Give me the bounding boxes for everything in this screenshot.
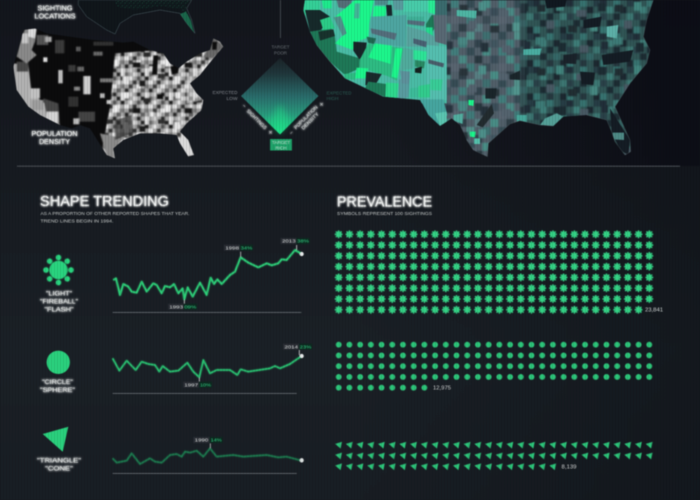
heading: shape trending: SHAPE TRENDING [40, 193, 169, 210]
legend: sightings axis: × [269, 130, 273, 136]
label: population density: POPULATION [32, 131, 78, 138]
legend: sightings axis: SIGHTINGS [245, 108, 268, 132]
label: sighting locations [34, 6, 76, 20]
legend: population density axis: − [289, 130, 295, 136]
trend chart: light: 1998 [225, 245, 239, 251]
pictogram: starburst symbols [333, 229, 655, 315]
legend: expected low label: EXPECTED [212, 90, 238, 95]
trend chart: triangle [113, 437, 304, 474]
legend: target rich badge: RICH [276, 145, 286, 150]
trend chart: light: 09% [184, 304, 197, 310]
legend: sightings axis: − [241, 103, 247, 110]
label: triangle cone: "CONE" [45, 465, 73, 472]
label: circle sphere: "CIRCLE" [42, 379, 73, 386]
legend: target rich badge: TARGET [272, 140, 290, 145]
map: large target-rich county map [300, 0, 653, 160]
legend: population density axis [289, 102, 324, 136]
label: population density: DENSITY [39, 139, 70, 146]
label: triangle cone [37, 457, 81, 472]
legend: expected low label [212, 90, 238, 101]
icon: circle [47, 351, 70, 374]
label: circle sphere [40, 379, 75, 394]
legend: expected high label [326, 90, 352, 101]
pictogram: circle symbols [333, 339, 655, 393]
legend: target poor label: POOR [274, 50, 287, 56]
trend chart: circle: 2014 [284, 344, 298, 350]
text: shape trending subtitle: AS A PROPORTION OF OTHER REPORTED SHAPES THAT YEAR. [40, 211, 190, 217]
text: prevalence subtitle: SYMBOLS REPRESENT 100 SIGHTINGS [337, 211, 432, 217]
text: shape trending subtitle [40, 211, 190, 224]
trend chart: circle: 23% [300, 344, 312, 350]
trend chart: triangle: 14% [211, 438, 222, 444]
legend: expected high label: EXPECTED [326, 90, 352, 95]
map: sighting locations (top small map) [78, 0, 195, 34]
label: triangle cone: "TRIANGLE" [37, 457, 81, 464]
value: 23,841: 23,841 [645, 308, 663, 314]
pictogram: triangle symbols [333, 440, 655, 472]
legend: target poor label [272, 44, 290, 56]
legend: sightings axis [241, 103, 273, 136]
legend: expected high label: HIGH [326, 96, 338, 101]
text: shape trending subtitle: TREND LINES BEGIN IN 1994. [40, 218, 114, 224]
map: population density [12, 28, 224, 159]
legend: target diamond [241, 58, 318, 134]
legend: target rich badge [270, 139, 292, 150]
legend: population density axis: × [320, 102, 324, 108]
label: sighting locations: LOCATIONS [34, 14, 76, 20]
icon: light starburst [43, 255, 74, 285]
trend chart: circle [113, 344, 312, 394]
value: 12,975: 12,975 [433, 386, 451, 392]
label: population density [32, 131, 78, 146]
legend: expected low label: LOW [226, 96, 238, 101]
label: light fireball flash: "FLASH" [44, 306, 74, 314]
trend chart: circle: 1997 [184, 382, 198, 388]
trend chart: light: 1993 [169, 304, 183, 310]
icon: triangle [43, 427, 68, 452]
label: light fireball flash: "FIREBALL" [40, 298, 78, 306]
legend: vertical leader line [279, 0, 282, 38]
legend: population density axis: DENSITY [301, 111, 321, 131]
value: 8,139: 8,139 [562, 464, 577, 470]
legend: population density axis: POPULATION [293, 105, 320, 131]
trend chart: light: 34% [241, 245, 253, 251]
label: light fireball flash: "LIGHT" [46, 290, 72, 298]
label: light fireball flash [40, 290, 78, 314]
trend chart: light: 38% [297, 239, 310, 245]
trend chart: light: 2013 [282, 239, 296, 245]
trend chart: light [113, 238, 310, 313]
trend chart: circle: 10% [200, 382, 212, 388]
heading: prevalence: PREVALENCE [337, 194, 432, 210]
label: circle sphere: "SPHERE" [40, 387, 75, 394]
legend: target poor label: TARGET [272, 44, 290, 50]
trend chart: triangle: 1990 [195, 438, 209, 444]
label: sighting locations: SIGHTING [38, 6, 72, 12]
